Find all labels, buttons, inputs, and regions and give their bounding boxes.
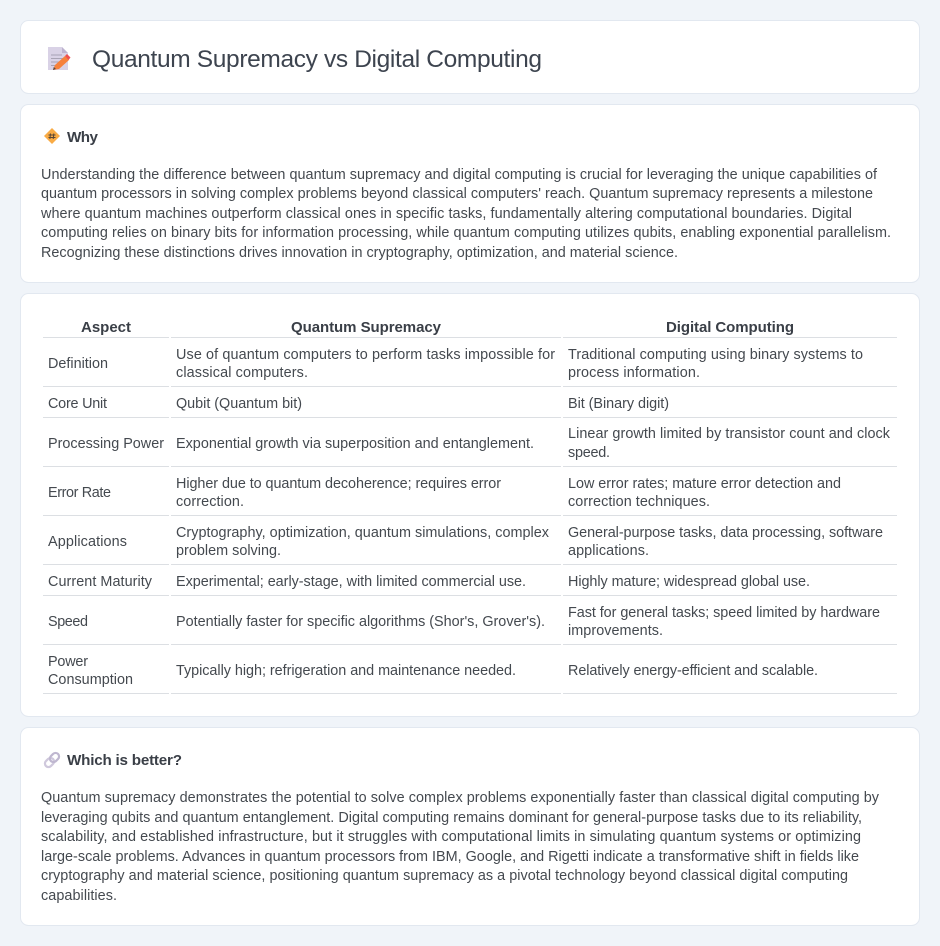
text block: why paragraph: Recognizing these distinctions drives innovation in cryptography, optimization, and material science.	[41, 245, 678, 261]
text block: which paragraph: cryptography and material science, positioning quantum supremacy as a pivotal technology beyond classical digital computing	[41, 868, 848, 884]
text block: which paragraph: capabilities.	[41, 888, 117, 904]
text block: why paragraph	[40, 167, 891, 261]
row: speed	[43, 605, 897, 645]
row: processing power	[43, 426, 897, 467]
row: applications	[43, 525, 897, 565]
row: applications: Applications	[48, 534, 127, 550]
row: current maturity: Current Maturity	[48, 574, 153, 590]
row: error rate	[43, 476, 897, 516]
text block: which paragraph: large-scale problems. Advances in quantum processors from IBM, Google, and Rigetti indicate a transformative shift in fields like	[41, 849, 859, 865]
row: definition: Definition	[48, 356, 108, 372]
row: definition: classical computers.	[176, 365, 308, 381]
row: processing power: Processing Power	[48, 436, 164, 452]
row: current maturity	[43, 574, 897, 596]
row: current maturity: Experimental; early-stage, with limited commercial use.	[176, 574, 526, 590]
text block: why paragraph: quantum processors in solving complex problems beyond classical computers' reach. Quantum supremacy represents a milestone	[41, 186, 873, 202]
panel: which is better	[20, 728, 920, 926]
row: applications: General-purpose tasks, data processing, software	[568, 525, 883, 541]
icon: orange diamond	[44, 128, 60, 144]
row: core unit: Bit (Binary digit)	[568, 396, 669, 412]
row: speed: improvements.	[568, 623, 663, 639]
row: error rate: Higher due to quantum decoherence; requires error	[176, 476, 501, 492]
icon: chain link	[43, 751, 61, 769]
row: power consumption: Relatively energy-efficient and scalable.	[568, 663, 818, 679]
text block: why paragraph: computing relies on binary bits for information processing, while quantum computing utilizes qubits, enabling exponential parallelism.	[41, 225, 891, 241]
row: applications: problem solving.	[176, 543, 281, 559]
table header row	[43, 319, 897, 338]
row: power consumption: Power	[48, 654, 88, 670]
title: Quantum Supremacy vs Digital Computing	[92, 46, 542, 73]
heading: which is better: Which is better?	[67, 752, 182, 769]
row: speed: Fast for general tasks; speed limited by hardware	[568, 605, 880, 621]
row: definition	[43, 347, 897, 387]
row: error rate: Error Rate	[48, 485, 111, 501]
row: power consumption: Typically high; refrigeration and maintenance needed.	[176, 663, 516, 679]
panel: header	[20, 20, 920, 94]
text block: which paragraph	[41, 790, 880, 904]
table header row: Digital Computing	[666, 319, 794, 336]
panel: why	[20, 104, 920, 282]
row: error rate: correction.	[176, 494, 244, 510]
row: processing power: Exponential growth via superposition and entanglement.	[176, 436, 534, 452]
text block: which paragraph: Quantum supremacy demonstrates the potential to solve complex problems exponentially faster than classical digital computing by	[41, 790, 880, 806]
icon: memo with pencil	[48, 47, 70, 70]
row: speed: Potentially faster for specific algorithms (Shor's, Grover's).	[176, 614, 545, 630]
row: core unit: Core Unit	[48, 396, 107, 412]
row: power consumption: Consumption	[48, 672, 133, 688]
row: current maturity: Highly mature; widespread global use.	[568, 574, 810, 590]
row: error rate: correction techniques.	[568, 494, 710, 510]
row: core unit	[43, 396, 897, 418]
row: power consumption	[43, 654, 897, 694]
panel: comparison table	[20, 294, 920, 716]
row: error rate: Low error rates; mature error detection and	[568, 476, 841, 492]
row: processing power: speed.	[568, 445, 610, 461]
table header row: Aspect	[81, 319, 131, 336]
row: definition: Traditional computing using binary systems to	[568, 347, 863, 363]
row: applications: Cryptography, optimization, quantum simulations, complex	[176, 525, 550, 541]
row: applications: applications.	[568, 543, 649, 559]
row: processing power: Linear growth limited by transistor count and clock	[568, 426, 891, 442]
row: definition: Use of quantum computers to perform tasks impossible for	[176, 347, 555, 363]
text block: which paragraph: leveraging qubits and quantum entanglement. Digital computing remains dominant for general-purpose tasks due to its reliability,	[41, 810, 862, 826]
row: speed: Speed	[48, 614, 88, 630]
heading: why: Why	[67, 129, 99, 146]
row: definition: process information.	[568, 365, 700, 381]
text block: which paragraph: scalability, and established infrastructure, but it struggles with computational limits in simulating quantum systems or optimizing	[41, 829, 861, 845]
text block: why paragraph: where quantum machines outperform classical ones in specific tasks, fundamentally altering computational boundaries. Digital	[40, 206, 852, 222]
table header row: Quantum Supremacy	[291, 319, 442, 336]
row: core unit: Qubit (Quantum bit)	[176, 396, 302, 412]
text block: why paragraph: Understanding the difference between quantum supremacy and digital computing is crucial for leveraging the unique capabilities of	[41, 167, 878, 183]
